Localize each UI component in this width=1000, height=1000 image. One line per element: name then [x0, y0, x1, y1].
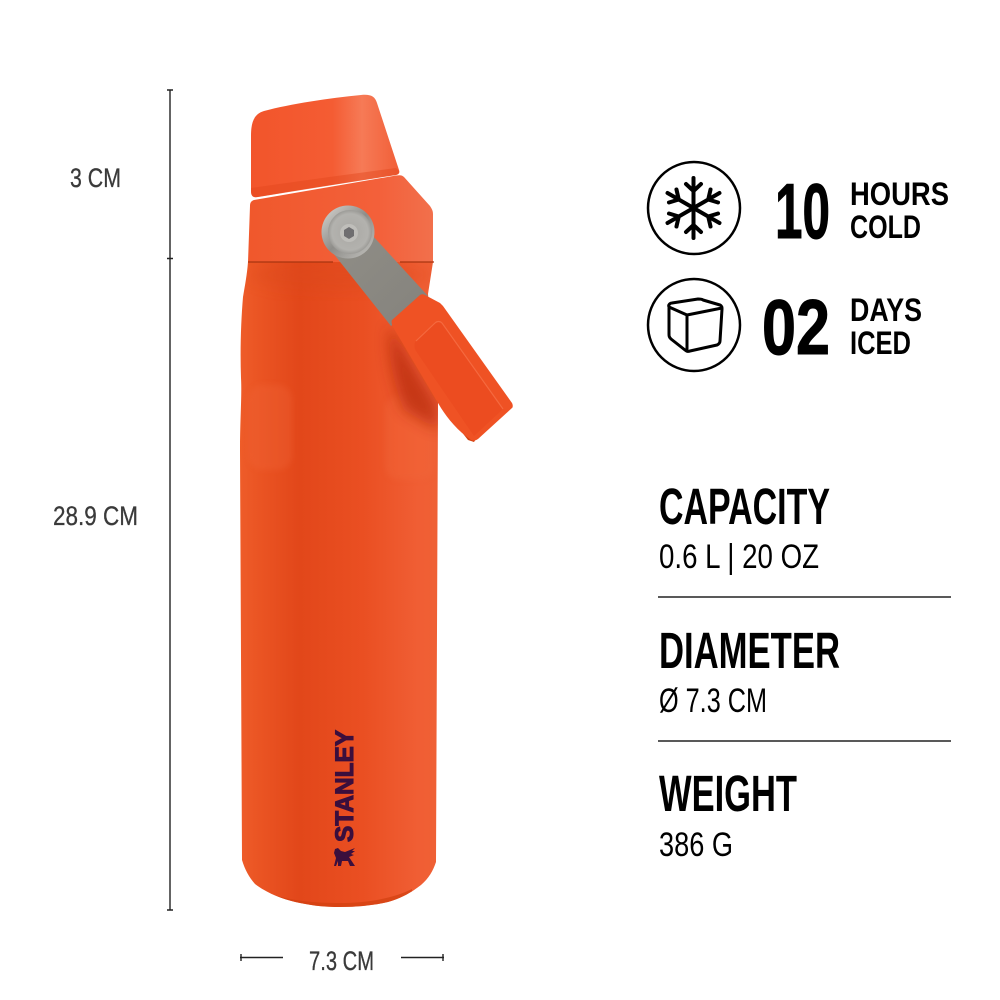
bottle illustration — [240, 95, 513, 912]
lid lower shading — [251, 168, 399, 197]
stat: 02 days iced: DAYS — [850, 292, 922, 328]
orange tab — [392, 294, 513, 441]
spec: capacity: 0.6 L | 20 OZ — [659, 538, 819, 576]
bottle body — [240, 262, 438, 907]
icon: ice cube in circle — [648, 279, 740, 371]
spec: weight — [659, 765, 797, 864]
icon: snowflake in circle — [648, 162, 740, 254]
tab inset panel — [414, 322, 503, 436]
collar — [248, 175, 433, 262]
body shading — [248, 259, 438, 912]
collar seam — [248, 261, 434, 263]
stat: 10 hours cold: 10 — [775, 167, 830, 255]
tab underside — [438, 392, 478, 442]
spec: capacity — [659, 478, 830, 576]
spec: weight: WEIGHT — [659, 765, 797, 822]
stat: 02 days iced: ICED — [850, 325, 911, 361]
stat: 02 days iced — [762, 283, 922, 371]
width dimension — [240, 946, 444, 976]
stat: 10 hours cold: HOURS — [850, 176, 949, 212]
logo: winged bear — [334, 848, 355, 866]
spec: weight: 386 G — [659, 826, 733, 864]
label: body height: 28.9 CM — [53, 501, 138, 531]
bottom rim shade — [272, 889, 412, 907]
label: cap height: 3 CM — [70, 163, 121, 193]
stat: 10 hours cold: COLD — [850, 209, 921, 245]
stat: 02 days iced: 02 — [762, 283, 830, 371]
label: width: 7.3 CM — [309, 946, 374, 976]
metal disc with screw — [322, 206, 374, 258]
spec: diameter: Ø 7.3 CM — [659, 682, 767, 720]
spec: diameter — [659, 622, 840, 720]
spec: capacity: CAPACITY — [659, 478, 830, 535]
spec: diameter: DIAMETER — [659, 622, 840, 679]
logo: STANLEY wordmark: STANLEY — [331, 730, 359, 842]
lid — [251, 95, 399, 197]
height dimension line — [167, 90, 173, 910]
metal strap — [333, 235, 428, 326]
stat: 10 hours cold — [775, 167, 949, 255]
